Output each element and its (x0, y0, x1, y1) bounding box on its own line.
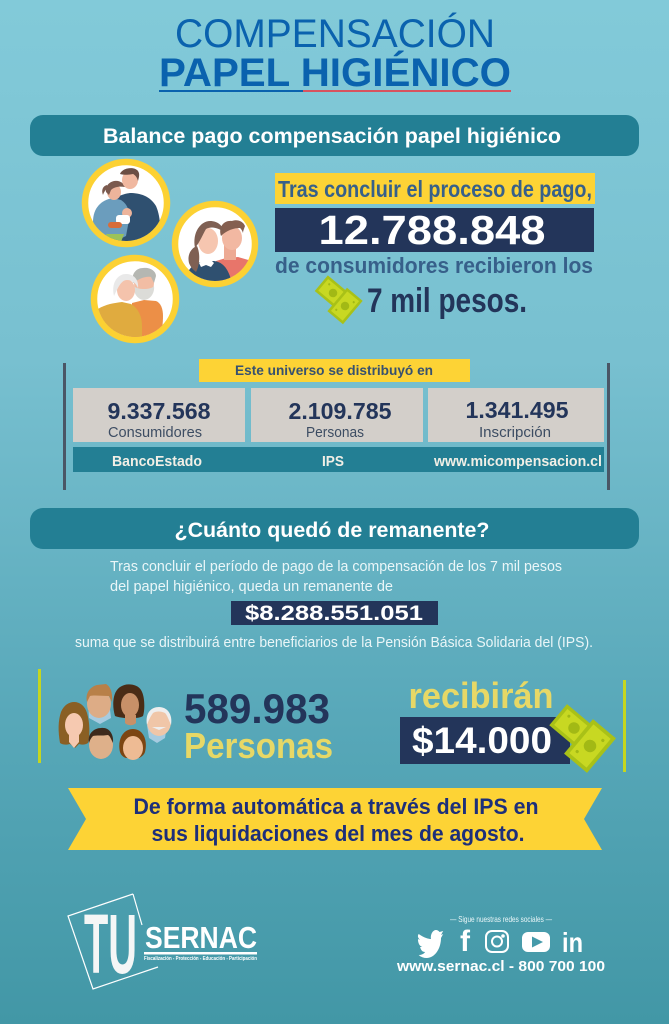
section header: balance: Balance pago compensación papel higiénico (103, 125, 561, 148)
text block: remanente: $8.288.551.051 (245, 602, 423, 625)
icon: instagram (486, 931, 508, 952)
logo: Tu Sernac: Fiscalización - Protección - Educación - Participación (144, 956, 257, 962)
left accent bar (38, 669, 41, 763)
logo: Tu Sernac: SERNAC (145, 920, 257, 955)
stat: BancoEstado: Consumidores (108, 424, 202, 441)
stat: BancoEstado (73, 388, 245, 472)
callout: payment process: de consumidores recibieron los (275, 253, 593, 278)
right accent bar (623, 680, 626, 772)
section header: remanente (30, 508, 639, 549)
section header: remanente: ¿Cuánto quedó de remanente? (174, 519, 490, 542)
stat: IPS: Personas (306, 424, 364, 441)
stat: persons: 589.983 (184, 685, 330, 732)
icon: linkedin: in (562, 927, 583, 958)
section header: balance (30, 115, 639, 156)
callout: payment process: Tras concluir el proceso de pago, (278, 176, 592, 202)
logo: Tu Sernac (68, 894, 257, 991)
stat: amount: recibirán (408, 675, 554, 716)
icon: elderly couple (94, 258, 176, 342)
text block: remanente: del papel higiénico, queda un remanente de (110, 579, 393, 595)
icon: group of people (59, 684, 171, 760)
logo: Tu Sernac: TU (84, 897, 137, 991)
icon: money bills (549, 704, 616, 773)
stat: persons: Personas (184, 725, 333, 766)
icon: youtube (522, 932, 550, 952)
stat: persons (184, 685, 333, 766)
text block: remanente: suma que se distribuirá entre beneficiarios de la Pensión Básica Solidaria del (IPS). (75, 635, 593, 651)
icon: twitter (418, 930, 443, 958)
icon: family with baby (85, 162, 167, 244)
panel: distribution (63, 359, 610, 490)
stat: BancoEstado: 9.337.568 (108, 398, 210, 424)
text: follow us: — Sigue nuestras redes sociales — (450, 914, 552, 924)
callout: payment process (275, 173, 595, 320)
callout: payment process: 7 mil pesos. (367, 282, 527, 320)
title (159, 11, 511, 95)
banner: automatic payment: sus liquidaciones del mes de agosto. (152, 821, 524, 846)
icon: facebook: f (460, 925, 471, 958)
text block: remanente: Tras concluir el período de pago de la compensación de los 7 mil pesos (110, 559, 562, 575)
stat: micompensacion (423, 388, 604, 472)
icon: couple (175, 204, 255, 287)
callout: payment process: 12.788.848 (318, 207, 546, 253)
stat: IPS: IPS (322, 454, 344, 470)
stat: BancoEstado: BancoEstado (112, 454, 202, 470)
text block: remanente (75, 559, 593, 651)
title: PAPEL HIGIÉNICO (159, 50, 511, 95)
panel: distribution: Este universo se distribuyó en (235, 362, 433, 378)
stat: micompensacion: Inscripción (479, 424, 551, 441)
stat: IPS: 2.109.785 (288, 398, 392, 424)
banner: automatic payment (68, 788, 602, 850)
text: contact: www.sernac.cl - 800 700 100 (396, 958, 605, 975)
stat: amount (400, 675, 570, 764)
stat: IPS (245, 388, 423, 472)
stat: amount: $14.000 (412, 720, 552, 761)
title: COMPENSACIÓN (175, 11, 495, 56)
stat: micompensacion: 1.341.495 (466, 397, 568, 423)
stat: micompensacion: www.micompensacion.cl (433, 454, 602, 470)
banner: automatic payment: De forma automática a través del IPS en (134, 794, 538, 819)
icon: money bills (315, 275, 363, 324)
